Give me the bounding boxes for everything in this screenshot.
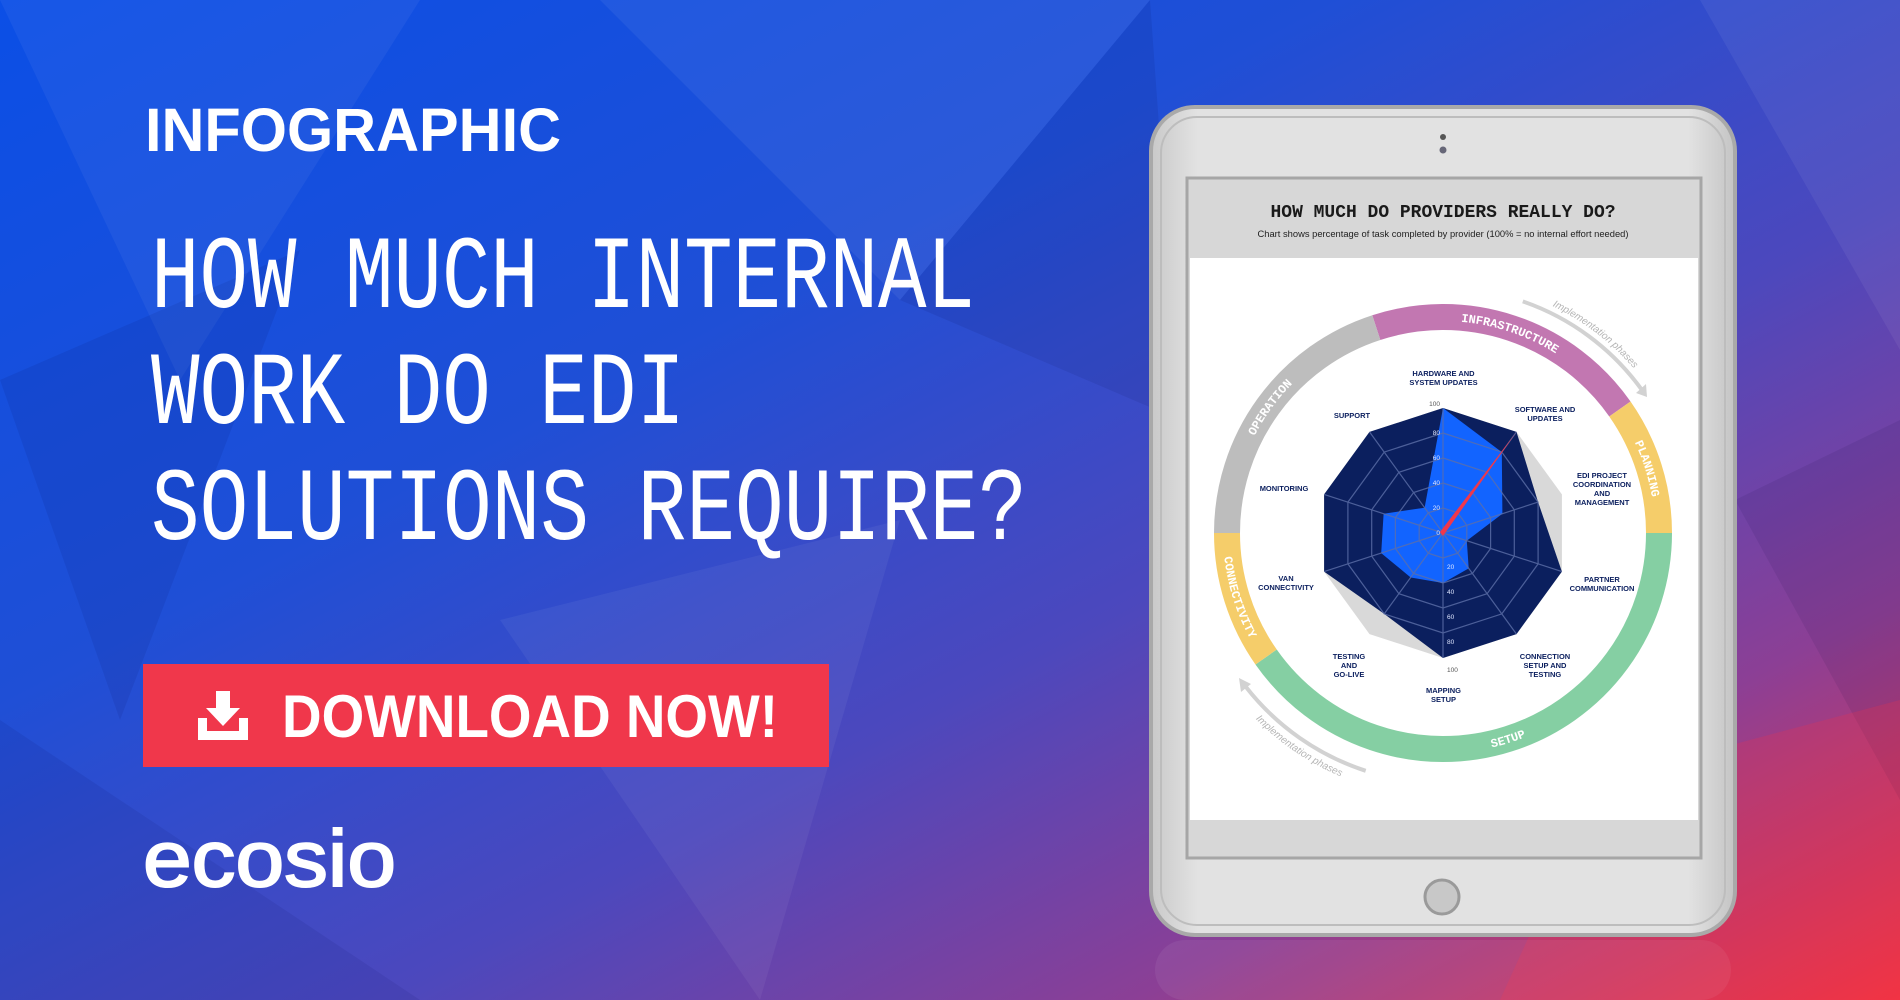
ring labels: PLANNING <box>1635 440 1660 496</box>
radar chart: 80 <box>1447 639 1455 646</box>
axis labels: MAPPING <box>1426 686 1461 695</box>
icon: download <box>198 691 248 740</box>
axis labels: HARDWARE AND <box>1412 369 1475 378</box>
screen <box>1186 176 1702 860</box>
tick labels: 20 <box>1433 505 1440 512</box>
tick labels: 0 <box>1436 530 1440 537</box>
axis labels: VAN <box>1278 574 1294 583</box>
radar chart: 40 <box>1447 589 1455 596</box>
logo: ecosio: ecosio <box>143 814 396 903</box>
axis labels: SYSTEM UPDATES <box>1409 378 1478 387</box>
axis labels: PARTNER <box>1584 575 1620 584</box>
axis labels: SETUP <box>1431 695 1456 704</box>
arrow: implementation phases bottom: Implementation phases <box>1256 715 1342 776</box>
icon: home button <box>1425 880 1459 914</box>
ring labels: SETUP <box>1490 730 1524 747</box>
axis labels: SOFTWARE AND <box>1515 405 1576 414</box>
tablet <box>1149 105 1737 1000</box>
button: download now: DOWNLOAD NOW! <box>282 683 778 750</box>
main headline: WORK DO EDI <box>151 337 685 455</box>
arrow: implementation phases bottom <box>1239 678 1366 776</box>
button: download now <box>143 664 829 767</box>
arrow: implementation phases top: Implementation phases <box>1552 300 1638 368</box>
axis labels: TESTING <box>1529 670 1561 679</box>
axis labels: TESTING <box>1333 652 1365 661</box>
axis labels: MONITORING <box>1260 484 1308 493</box>
chart title: HOW MUCH DO PROVIDERS REALLY DO? <box>1270 203 1616 223</box>
axis labels: CONNECTION <box>1520 652 1570 661</box>
ring labels <box>1224 314 1660 747</box>
radar chart: 20 <box>1447 564 1455 571</box>
tick labels: 60 <box>1433 455 1440 462</box>
phase ring <box>1227 317 1659 749</box>
axis labels: AND <box>1341 661 1358 670</box>
ring labels: CONNECTIVITY <box>1224 556 1257 636</box>
axis labels: CONNECTIVITY <box>1258 583 1314 592</box>
main headline <box>151 221 1027 571</box>
axis labels <box>1258 369 1634 704</box>
axis labels: UPDATES <box>1527 414 1563 423</box>
red needle <box>1440 432 1516 536</box>
tick labels: 40 <box>1433 480 1440 487</box>
axis labels: GO-LIVE <box>1334 670 1364 679</box>
icon: camera <box>1440 134 1446 154</box>
tick labels <box>1429 401 1440 537</box>
ring labels: OPERATION <box>1248 378 1292 434</box>
tick labels: 80 <box>1433 430 1440 437</box>
axis labels: SUPPORT <box>1334 411 1371 420</box>
axis labels: COORDINATION <box>1573 480 1631 489</box>
label: INFOGRAPHIC: INFOGRAPHIC <box>145 96 561 164</box>
radar chart: 100 <box>1447 667 1458 674</box>
axis labels: AND <box>1594 489 1611 498</box>
axis labels: SETUP AND <box>1524 661 1567 670</box>
axis labels: EDI PROJECT <box>1577 471 1627 480</box>
arrow: implementation phases top <box>1522 300 1647 397</box>
axis labels: MANAGEMENT <box>1575 498 1630 507</box>
ring labels: INFRASTRUCTURE <box>1462 314 1560 354</box>
tick labels: 100 <box>1429 401 1440 408</box>
main headline: HOW MUCH INTERNAL <box>151 221 975 339</box>
chart subtitle: Chart shows percentage of task completed by provider (100% = no internal effort needed) <box>1258 229 1628 239</box>
radar chart: 60 <box>1447 614 1455 621</box>
radar chart <box>1324 401 1562 674</box>
axis labels: COMMUNICATION <box>1570 584 1634 593</box>
main headline: SOLUTIONS REQUIRE? <box>151 453 1027 571</box>
